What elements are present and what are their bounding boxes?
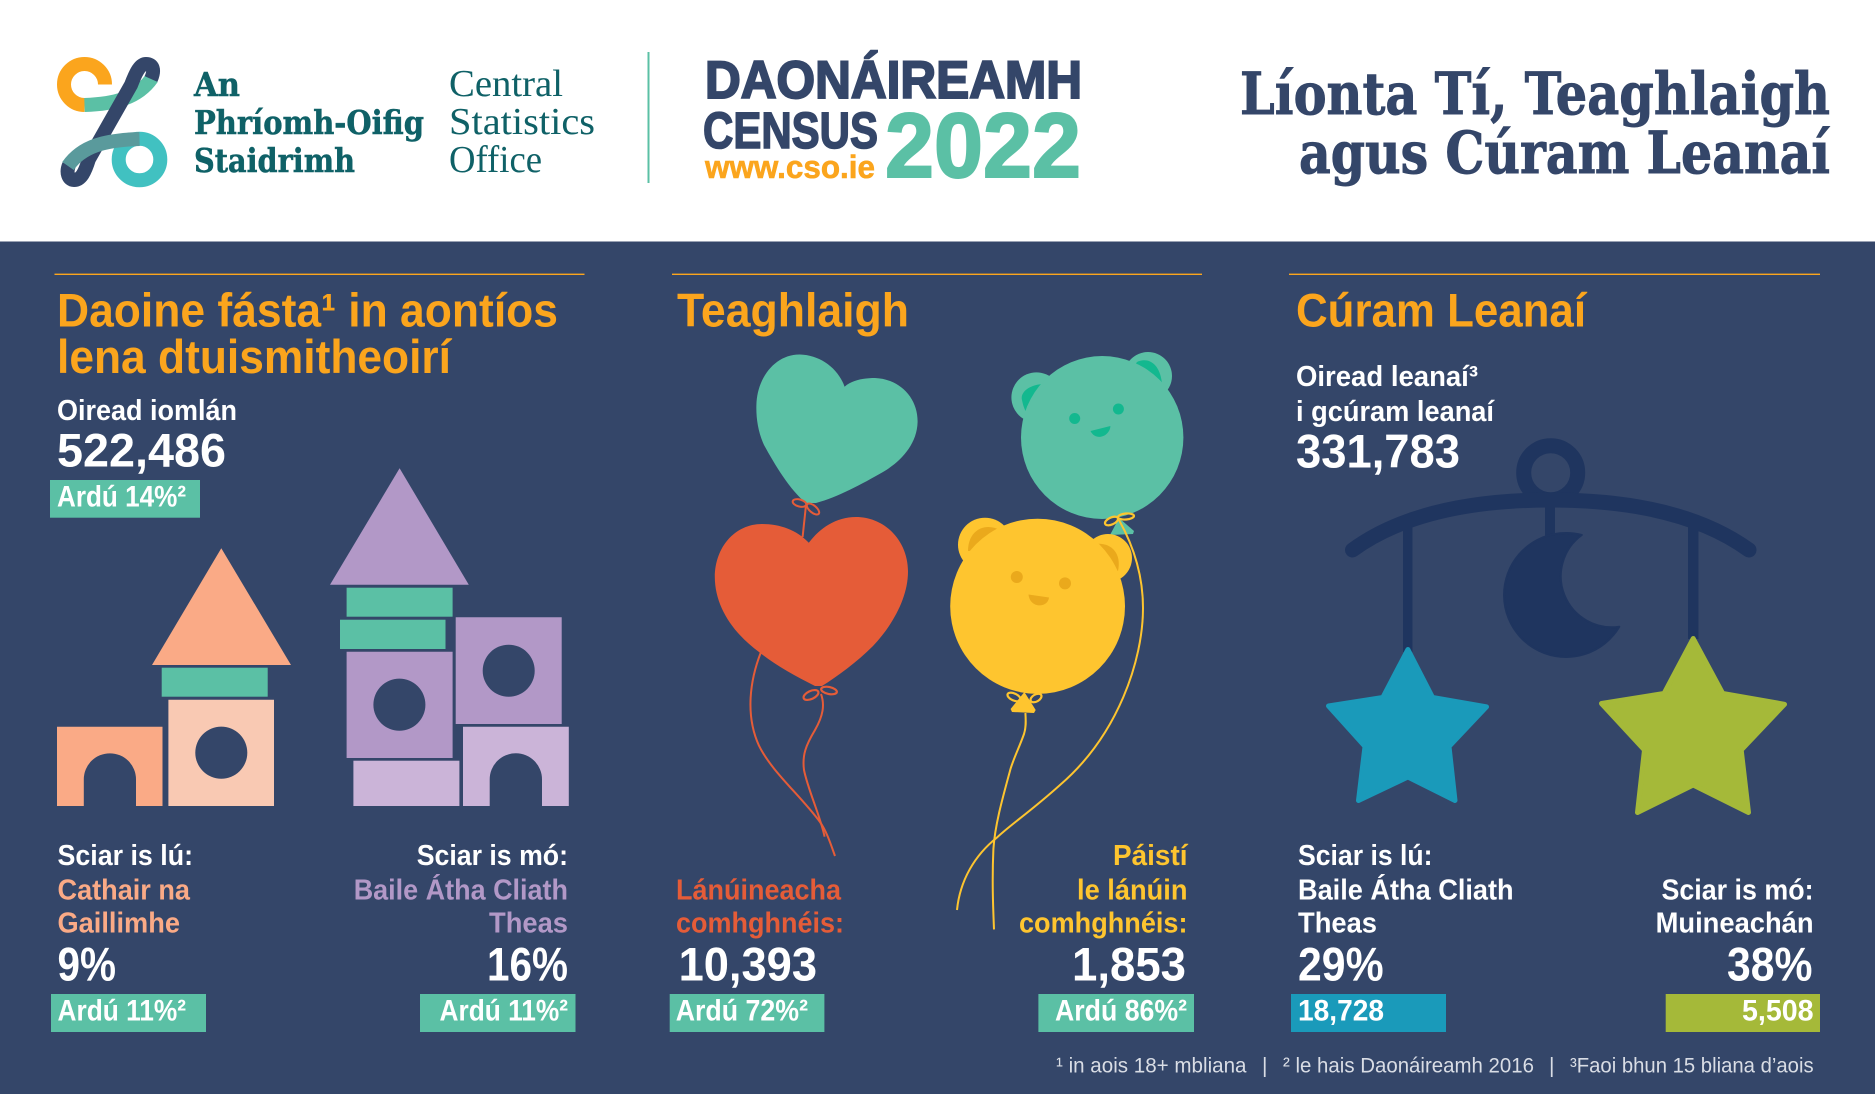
- highest share: Theas: [489, 908, 568, 940]
- icon: baby mobile: [1328, 446, 1784, 812]
- icon: bear balloons: [950, 352, 1183, 929]
- same-sex couples stat: [670, 874, 844, 1032]
- lowest share: Baile Átha Cliath: [1298, 872, 1514, 906]
- census logo: 2022: [885, 95, 1081, 197]
- highest share: [1656, 874, 1820, 1032]
- panel: childcare: [1291, 284, 1820, 1032]
- header: [64, 50, 1830, 197]
- lowest share: 9%: [58, 938, 116, 991]
- children with same-sex couples stat: 1,853: [1072, 938, 1186, 991]
- highest share: Muineachán: [1656, 908, 1814, 940]
- lowest share: Sciar is lú:: [58, 840, 193, 872]
- footnotes: ² le hais Daonáireamh 2016: [1283, 1055, 1534, 1078]
- lowest share: 29%: [1298, 938, 1384, 991]
- heading: Cúram Leanaí: [1296, 284, 1588, 337]
- increase badge: Ardú 14%²: [57, 481, 186, 514]
- census logo: CENSUS: [703, 102, 878, 159]
- lowest share: 18,728: [1298, 995, 1384, 1028]
- lowest share: [51, 840, 206, 1032]
- same-sex couples stat: comhghnéis:: [676, 908, 844, 940]
- census logo: [703, 50, 1082, 197]
- highest share: 38%: [1727, 938, 1812, 991]
- same-sex couples stat: Ardú 72%²: [676, 995, 808, 1028]
- census logo: DAONÁIREAMH: [705, 50, 1082, 110]
- heading: lena dtuismitheoirí: [57, 330, 453, 383]
- logo text: Irish name: Phríomh-Oifig: [194, 103, 424, 142]
- icon: orange building blocks: [57, 548, 291, 806]
- total label: i gcúram leanaí: [1296, 396, 1495, 428]
- logo text: English name: Central: [449, 63, 563, 105]
- highest share: Baile Átha Cliath: [354, 872, 568, 906]
- title: [1240, 60, 1830, 187]
- total label: Oiread leanaí³: [1296, 361, 1478, 393]
- children with same-sex couples stat: comhghnéis:: [1019, 908, 1188, 940]
- highest share: Ardú 11%²: [440, 995, 568, 1028]
- logo text: English name: Office: [449, 139, 542, 181]
- total label: Oiread iomlán: [57, 395, 237, 427]
- logo text: Irish name: An: [193, 65, 240, 104]
- icon: green star: [1602, 638, 1784, 812]
- highest share: 16%: [487, 938, 568, 991]
- footnotes: ³Faoi bhun 15 bliana d’aois: [1570, 1055, 1814, 1078]
- children with same-sex couples stat: Ardú 86%²: [1055, 995, 1187, 1028]
- lowest share: Sciar is lú:: [1298, 840, 1432, 872]
- icon: heart balloons: [715, 354, 918, 856]
- heading: [57, 284, 558, 383]
- lowest share: [1291, 840, 1514, 1032]
- icon: blue star: [1328, 650, 1486, 800]
- highest share: [354, 840, 576, 1032]
- footnotes: |: [1262, 1055, 1267, 1078]
- census logo: www.cso.ie: [704, 149, 875, 185]
- logo text: English name: Statistics: [449, 101, 595, 143]
- children with same-sex couples stat: le lánúin: [1077, 874, 1188, 906]
- logo text: English name: [449, 63, 595, 181]
- lowest share: Cathair na: [58, 874, 191, 906]
- heading: Teaghlaigh: [677, 284, 909, 337]
- footnotes: |: [1549, 1055, 1554, 1078]
- highest share: 5,508: [1742, 995, 1814, 1028]
- same-sex couples stat: 10,393: [679, 938, 817, 991]
- total number: 331,783: [1296, 424, 1460, 478]
- same-sex couples stat: Lánúineacha: [676, 874, 842, 906]
- logo text: Irish name: [193, 65, 424, 180]
- heading: Daoine fásta¹ in aontíos: [57, 284, 558, 337]
- lowest share: Gaillimhe: [58, 908, 180, 940]
- logo text: Irish name: Staidrimh: [194, 141, 355, 180]
- footnotes: [1056, 1055, 1814, 1078]
- icon: purple building blocks: [330, 468, 569, 806]
- total label: [1296, 361, 1495, 428]
- panel: families: [670, 284, 1194, 1032]
- total number: 522,486: [57, 424, 226, 477]
- footnotes: ¹ in aois 18+ mbliana: [1056, 1055, 1247, 1078]
- highest share: Sciar is mó:: [417, 840, 568, 872]
- children with same-sex couples stat: [1019, 840, 1194, 1032]
- lowest share: Theas: [1298, 908, 1377, 940]
- children with same-sex couples stat: Páistí: [1113, 840, 1188, 872]
- icon: CSO logo: [64, 64, 160, 180]
- lowest share: Ardú 11%²: [58, 995, 186, 1028]
- highest share: Sciar is mó:: [1662, 874, 1814, 906]
- panel: adults living with parents: [50, 284, 576, 1032]
